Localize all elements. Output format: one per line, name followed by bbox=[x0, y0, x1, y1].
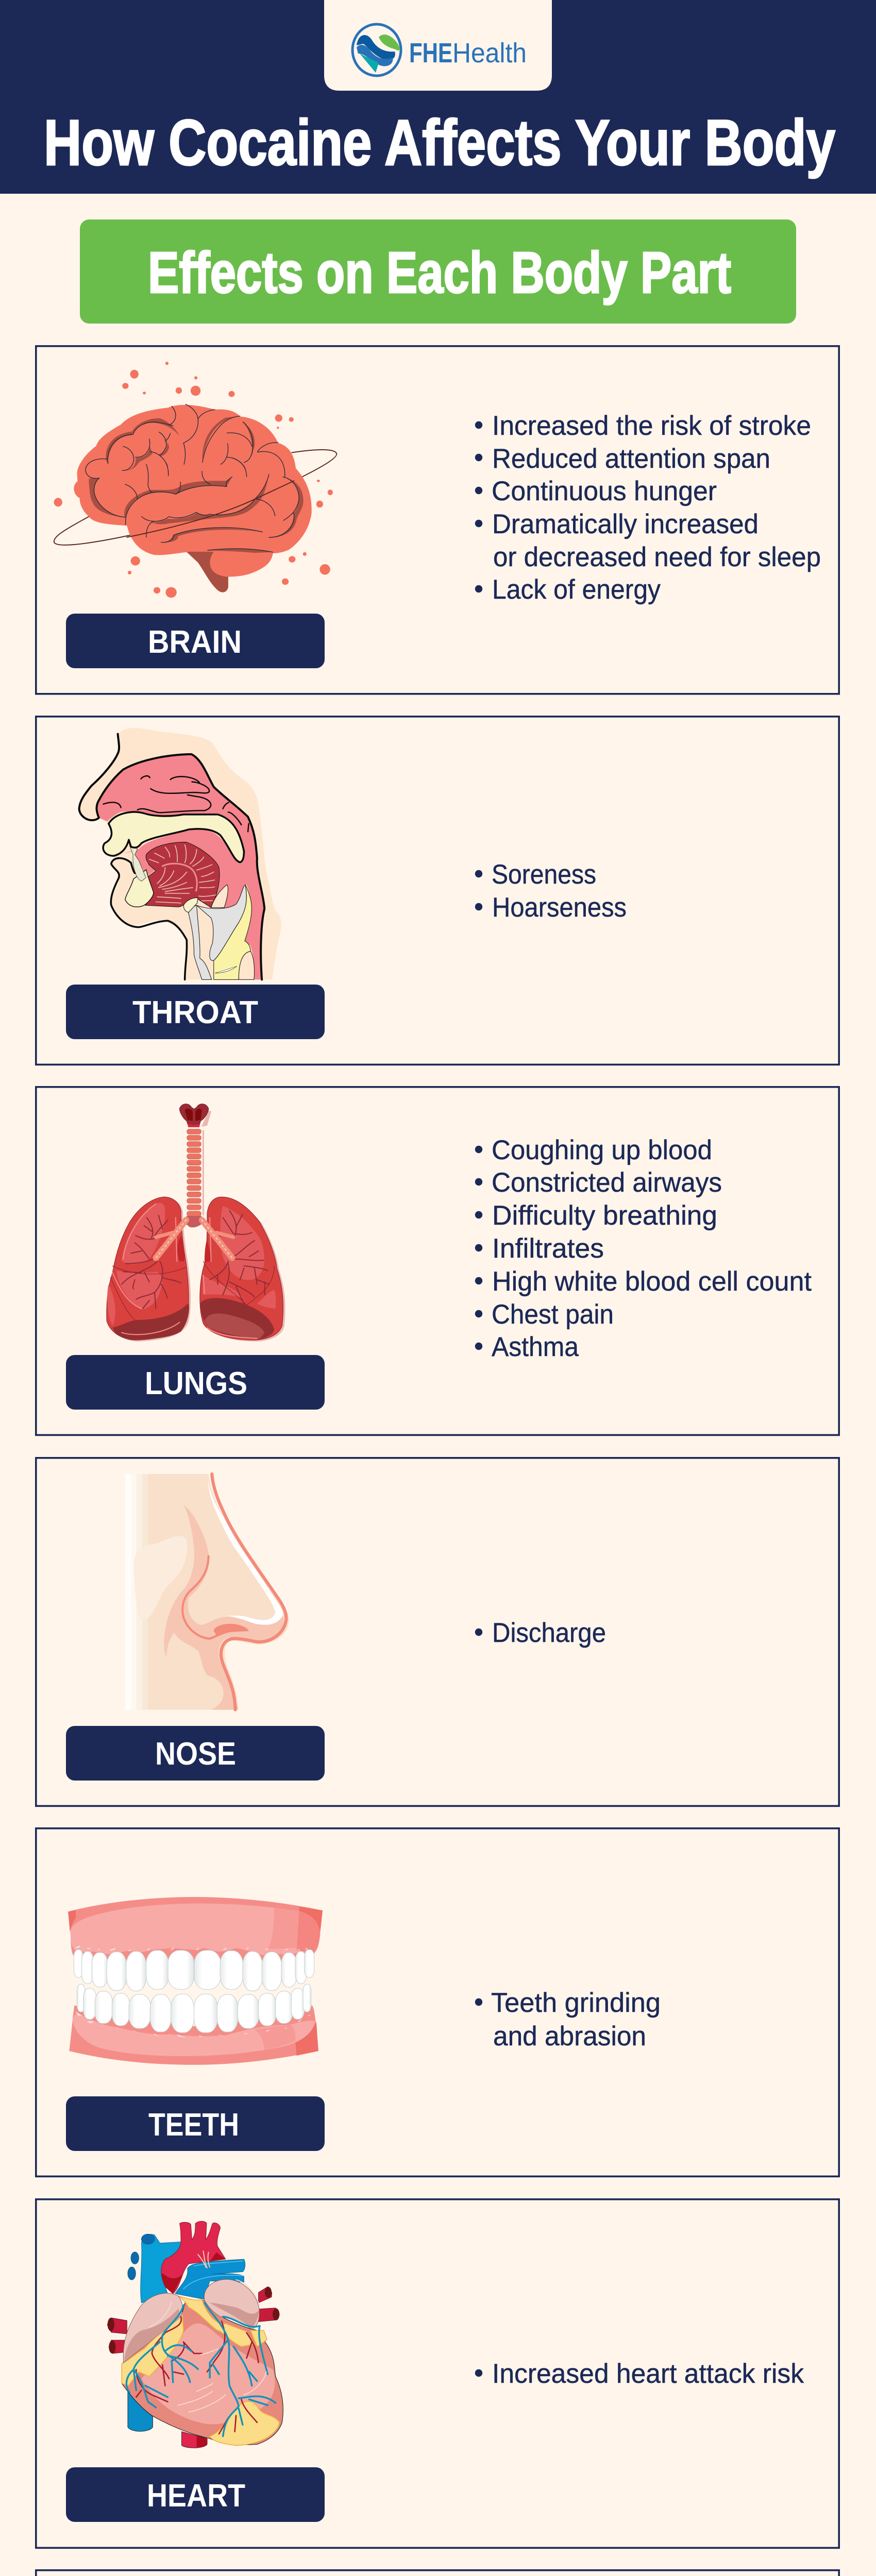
effects list: brain: Reduced attention span bbox=[492, 444, 770, 474]
panel: teeth bbox=[36, 1828, 839, 2176]
icon: anatomical heart bbox=[107, 2221, 283, 2448]
effects list: teeth bbox=[475, 1988, 661, 2052]
section heading: effects on each body part bbox=[80, 219, 796, 324]
panel: nose bbox=[36, 1458, 839, 1806]
panel: lungs bbox=[36, 1087, 839, 1435]
effects list: lungs: Coughing up blood bbox=[492, 1135, 712, 1165]
effects list: nose: Discharge bbox=[492, 1618, 606, 1648]
label: throat: THROAT bbox=[132, 995, 258, 1030]
icon: teeth and gums bbox=[68, 1897, 323, 2065]
section heading: effects on each body part: Effects on Each Body Part bbox=[148, 240, 731, 305]
logo mark bbox=[352, 24, 401, 76]
icon: brain bbox=[54, 362, 336, 598]
effects list: lungs bbox=[475, 1135, 812, 1362]
effects list: lungs: Constricted airways bbox=[492, 1167, 722, 1198]
label: brain bbox=[66, 614, 325, 668]
label: nose bbox=[66, 1726, 325, 1781]
effects list: brain: Increased the risk of stroke bbox=[492, 411, 811, 441]
panel: throat bbox=[36, 717, 839, 1064]
label: teeth bbox=[66, 2096, 325, 2151]
logo tab bbox=[324, 0, 552, 91]
effects list: lungs: Asthma bbox=[492, 1332, 579, 1362]
effects list: throat bbox=[475, 859, 627, 923]
effects list: throat: Soreness bbox=[492, 859, 596, 890]
label: nose: NOSE bbox=[155, 1736, 236, 1772]
label: heart bbox=[66, 2467, 325, 2522]
effects list: throat: Hoarseness bbox=[492, 892, 627, 923]
label: lungs: LUNGS bbox=[145, 1366, 247, 1401]
effects list: lungs: Chest pain bbox=[492, 1299, 614, 1330]
effects list: lungs: Infiltrates bbox=[492, 1233, 604, 1264]
label: teeth: TEETH bbox=[148, 2107, 239, 2143]
logo wordmark: Health bbox=[452, 38, 527, 69]
effects list: brain: Dramatically increased bbox=[492, 509, 759, 539]
effects list: teeth: and abrasion bbox=[493, 2021, 646, 2052]
effects list: heart: Increased heart attack risk bbox=[492, 2359, 804, 2389]
effects list: brain bbox=[475, 411, 821, 605]
panel: brain bbox=[36, 346, 839, 694]
label: lungs bbox=[66, 1355, 325, 1410]
effects list: lungs: Difficulty breathing bbox=[492, 1200, 717, 1231]
effects list: brain: Continuous hunger bbox=[492, 476, 717, 506]
effects list: teeth: Teeth grinding bbox=[491, 1988, 661, 2018]
icon: throat cross-section bbox=[79, 728, 281, 979]
effects list: brain: or decreased need for sleep bbox=[493, 542, 821, 572]
icon: lungs and trachea bbox=[107, 1104, 285, 1342]
label: throat bbox=[66, 985, 325, 1039]
logo wordmark: FHE bbox=[409, 38, 452, 69]
effects list: brain: Lack of energy bbox=[492, 574, 661, 605]
header band bbox=[0, 0, 876, 194]
label: heart: HEART bbox=[147, 2478, 245, 2514]
logo wordmark bbox=[409, 38, 527, 69]
label: brain: BRAIN bbox=[148, 624, 242, 660]
effects list: lungs: High white blood cell count bbox=[492, 1266, 812, 1297]
panel: skin bbox=[36, 2570, 839, 2576]
panel: heart bbox=[36, 2199, 839, 2548]
icon: nose profile bbox=[125, 1474, 289, 1710]
